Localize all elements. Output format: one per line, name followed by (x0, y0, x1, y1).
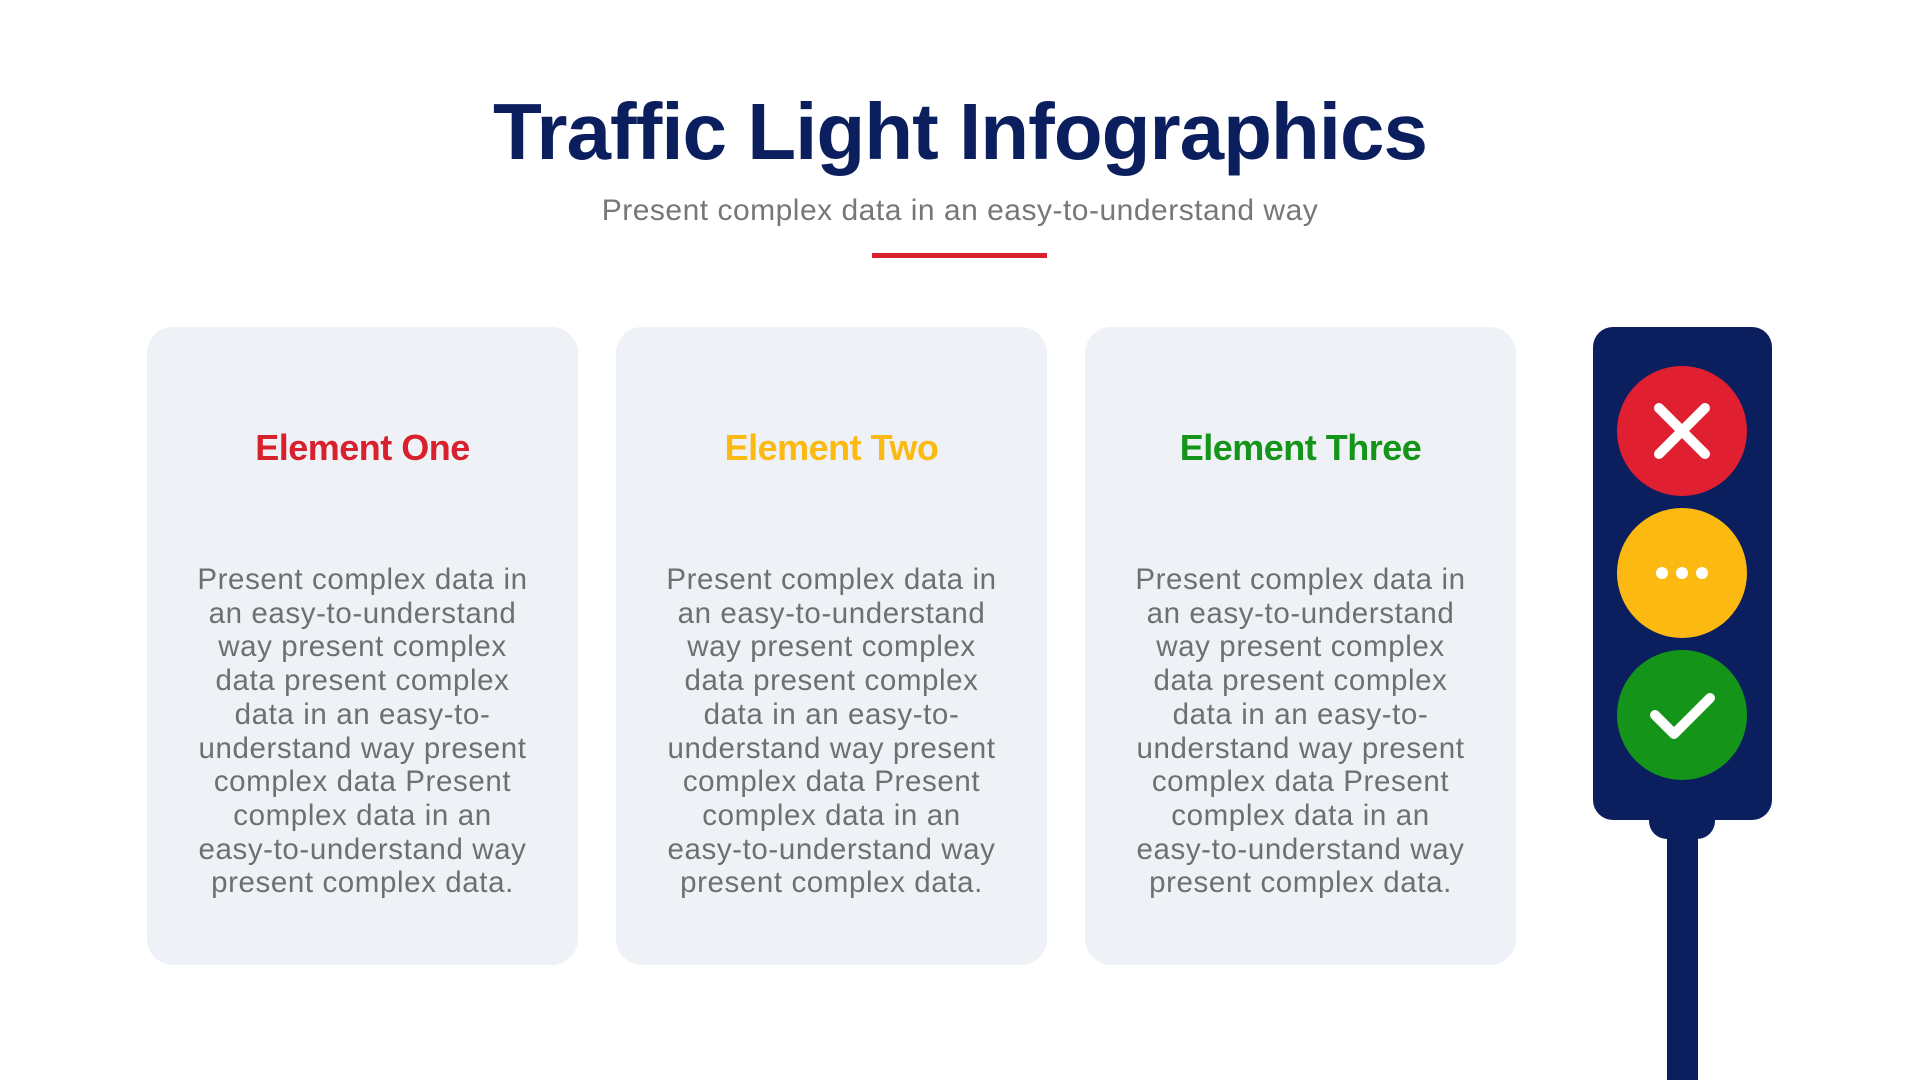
heading: element two: Element Two (725, 427, 938, 468)
body text one: data in an easy-to- (235, 698, 490, 731)
housing (1593, 327, 1772, 820)
panel: element one (147, 327, 578, 965)
body text three: an easy-to-understand (1147, 597, 1454, 630)
body text three (1135, 563, 1466, 899)
body text three: complex data Present (1152, 765, 1449, 798)
body text three: present complex data. (1149, 866, 1452, 899)
body text one: easy-to-understand way (198, 833, 527, 866)
body text two: easy-to-understand way (667, 833, 996, 866)
body text two: complex data in an (702, 799, 961, 832)
body text two: an easy-to-understand (678, 597, 985, 630)
body text two: understand way present (667, 732, 996, 765)
body text three: Present complex data in (1135, 563, 1466, 596)
body text three: easy-to-understand way (1136, 833, 1465, 866)
icon: yellow dots (1617, 508, 1747, 638)
body text one (197, 563, 528, 899)
panel: element three (1085, 327, 1516, 965)
body text three: way present complex (1156, 630, 1445, 663)
body text three: data present complex (1153, 664, 1448, 697)
icon: red x (1617, 366, 1747, 496)
body text two: present complex data. (680, 866, 983, 899)
body text three: understand way present (1136, 732, 1465, 765)
body text one: way present complex (218, 630, 507, 663)
panel: element two (616, 327, 1047, 965)
body text one: complex data Present (214, 765, 511, 798)
body text one: Present complex data in (197, 563, 528, 596)
body text one: present complex data. (211, 866, 514, 899)
body text three: data in an easy-to- (1173, 698, 1428, 731)
pole (1649, 800, 1715, 1080)
body text two: complex data Present (683, 765, 980, 798)
body text one: complex data in an (233, 799, 492, 832)
body text two (666, 563, 997, 899)
body text two: data in an easy-to- (704, 698, 959, 731)
title: Traffic Light Infographics (493, 87, 1427, 176)
icon: green check (1617, 650, 1747, 780)
body text one: data present complex (215, 664, 510, 697)
body text three: complex data in an (1171, 799, 1430, 832)
body text one: understand way present (198, 732, 527, 765)
heading: element three: Element Three (1180, 427, 1421, 468)
body text two: way present complex (687, 630, 976, 663)
body text two: Present complex data in (666, 563, 997, 596)
body text two: data present complex (684, 664, 979, 697)
red underline (872, 253, 1047, 258)
subtitle: Present complex data in an easy-to-understand way (602, 194, 1318, 227)
heading: element one: Element One (255, 427, 470, 468)
body text one: an easy-to-understand (209, 597, 516, 630)
